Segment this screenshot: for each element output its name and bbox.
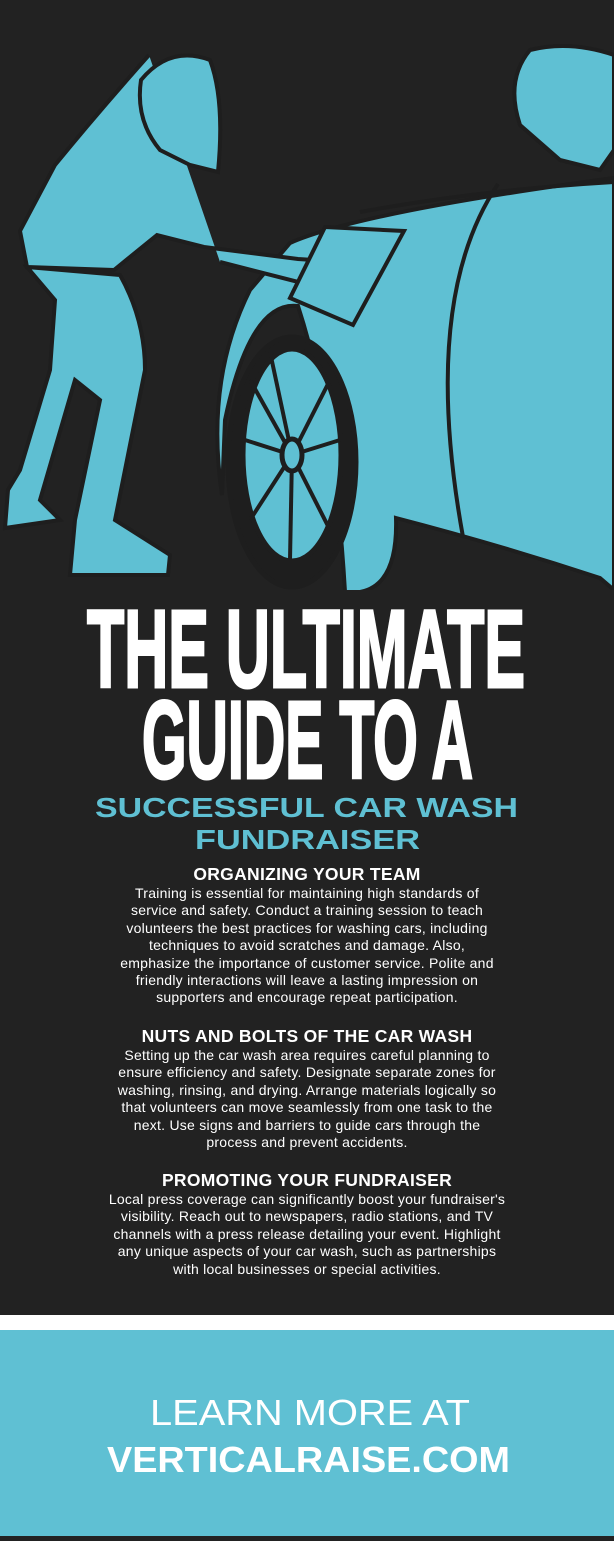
section: nuts and bolts: that volunteers can move seamlessly from one task to the — [121, 1099, 493, 1115]
section: nuts and bolts: ensure efficiency and safety. Designate separate zones for — [118, 1064, 496, 1080]
section: organizing your team: service and safety. Conduct a training session to teach — [131, 902, 483, 918]
subtitle — [95, 792, 518, 855]
section: organizing your team: volunteers the best practices for washing cars, including — [126, 920, 488, 936]
section: organizing your team: techniques to avoid scratches and damage. Also, — [149, 937, 465, 953]
section: nuts and bolts: next. Use signs and barriers to guide cars through the — [134, 1117, 480, 1133]
section: promoting: Local press coverage can significantly boost your fundraiser's — [109, 1191, 505, 1207]
section: organizing your team: emphasize the importance of customer service. Polite and — [120, 955, 494, 971]
section: organizing your team: ORGANIZING YOUR TEAM — [193, 864, 421, 884]
section: promoting: with local businesses or special activities. — [173, 1261, 441, 1277]
section: promoting: PROMOTING YOUR FUNDRAISER — [162, 1170, 452, 1190]
section: promoting: channels with a press release detailing your event. Highlight — [113, 1226, 501, 1242]
section: nuts and bolts: washing, rinsing, and drying. Arrange materials logically so — [118, 1082, 496, 1098]
footer — [0, 1330, 614, 1536]
car mirror — [514, 46, 614, 170]
person — [5, 55, 404, 575]
section: promoting — [109, 1170, 505, 1277]
section: nuts and bolts: Setting up the car wash area requires careful planning to — [124, 1047, 490, 1063]
section: organizing your team — [120, 864, 494, 1005]
title — [86, 590, 525, 855]
section: organizing your team: friendly interactions will leave a lasting impression on — [136, 972, 478, 988]
section: promoting: any unique aspects of your car wash, such as partnerships — [118, 1243, 496, 1259]
section: nuts and bolts — [118, 1026, 496, 1150]
section: nuts and bolts: NUTS AND BOLTS OF THE CAR WASH — [142, 1026, 472, 1046]
footer: LEARN MORE AT — [150, 1392, 470, 1433]
subtitle: FUNDRAISER — [195, 824, 420, 855]
subtitle: SUCCESSFUL CAR WASH — [95, 792, 518, 823]
footer: VERTICALRAISE.COM — [107, 1439, 510, 1480]
illustration: person washing car — [7, 48, 612, 590]
section: organizing your team: Training is essential for maintaining high standards of — [135, 885, 479, 901]
section: nuts and bolts: process and prevent accidents. — [206, 1134, 408, 1150]
white band — [0, 1315, 614, 1330]
car body — [217, 178, 614, 592]
section: organizing your team: supporters and encourage repeat participation. — [156, 989, 458, 1005]
section: promoting: visibility. Reach out to newspapers, radio stations, and TV — [121, 1208, 493, 1224]
car wheel — [228, 337, 356, 587]
